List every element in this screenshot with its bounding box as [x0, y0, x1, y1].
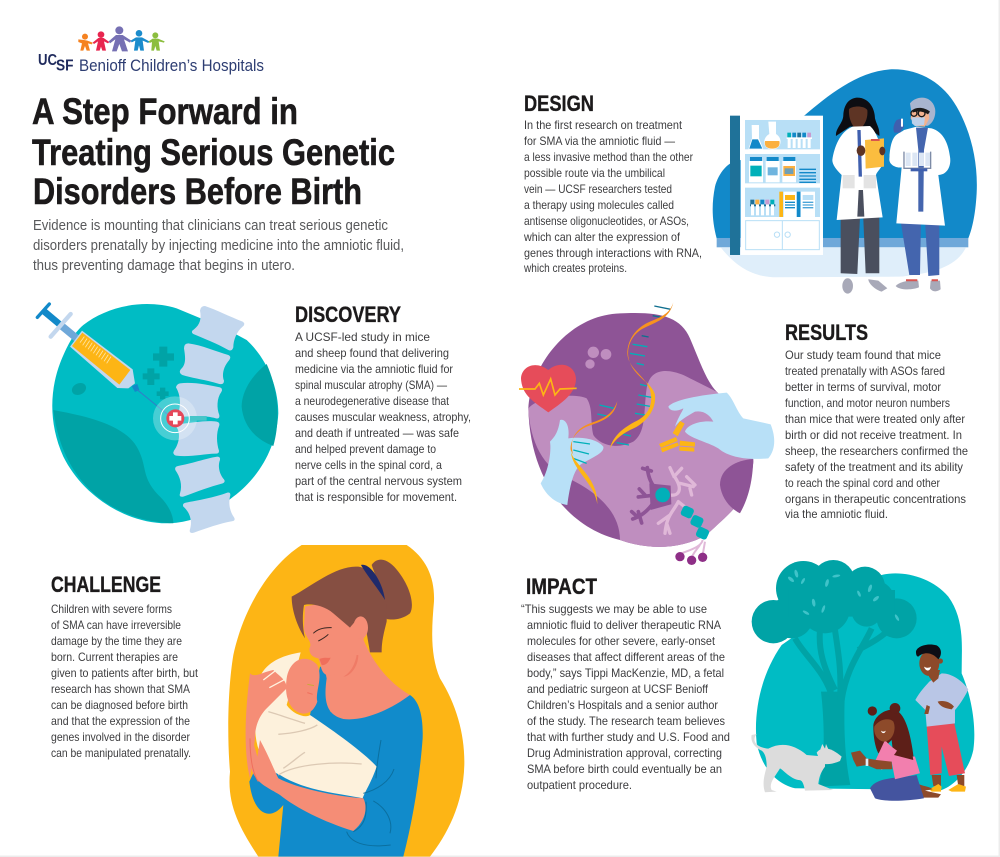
lab shelf	[730, 116, 823, 255]
panel: challenge text	[51, 572, 199, 760]
icon: paper-chain children	[78, 26, 165, 51]
heading: design: DESIGN	[524, 91, 594, 116]
tree	[752, 560, 917, 787]
illustration: lab researchers	[713, 69, 977, 294]
body: results: sheep, the researchers confirmed the	[785, 445, 968, 458]
title: A Step Forward in	[32, 90, 298, 132]
illustration: syringe and spine	[37, 304, 278, 533]
body: impact: body,” says Tippi MacKenzie, MD, a fetal	[527, 667, 724, 680]
body: discovery: and death if untreated — was safe	[295, 427, 459, 440]
mother's face	[304, 604, 367, 675]
body: discovery: medicine via the amniotic fluid for	[295, 363, 453, 376]
mother's hair bun	[372, 560, 412, 619]
DNA strands	[571, 302, 673, 504]
title: Disorders Before Birth	[33, 170, 362, 212]
logo wordmark Benioff: Benioff Children’s Hospitals	[79, 57, 264, 75]
body: impact: diseases that affect different areas of the	[527, 651, 725, 664]
body: impact	[521, 603, 730, 792]
yellow blob	[228, 545, 464, 857]
heart icon	[519, 365, 577, 412]
body: impact: “This suggests we may be able to use	[521, 603, 707, 616]
teal blob	[756, 573, 974, 790]
intro text	[33, 218, 404, 274]
logo wordmark UCSF: SF	[56, 58, 74, 74]
body: results: better in terms of survival, motor	[785, 381, 941, 394]
body: impact: of the study. The research team believes	[527, 715, 725, 728]
illustration: DNA, heart, hands and neuron	[519, 302, 774, 565]
hand: right	[668, 393, 774, 459]
medical pluses	[143, 347, 174, 399]
logo wordmark UCSF	[38, 52, 74, 74]
tree leaves	[787, 569, 900, 622]
mother's skin: neck and chest	[323, 635, 410, 719]
heading: challenge: CHALLENGE	[51, 572, 161, 597]
body: impact: Drug Administration approval, correcting	[527, 747, 722, 760]
purple blob	[528, 313, 753, 547]
body: challenge	[51, 603, 199, 760]
body: challenge: born. Current therapies are	[51, 651, 178, 664]
body: challenge: damage by the time they are	[51, 635, 182, 648]
title	[32, 90, 395, 212]
heading: results: RESULTS	[785, 320, 868, 345]
body: design: vein — UCSF researchers tested	[524, 183, 672, 196]
body: challenge: can be diagnosed before birth	[51, 699, 188, 712]
title: Treating Serious Genetic	[32, 131, 395, 173]
body: discovery: part of the central nervous system	[295, 475, 462, 488]
body: discovery: that is responsible for movement.	[295, 491, 457, 504]
body: results: Our study team found that mice	[785, 349, 941, 362]
body: discovery	[295, 331, 471, 504]
body: discovery: A UCSF-led study in mice	[295, 331, 430, 344]
body: design: a less invasive method than the other	[524, 151, 693, 164]
syringe	[37, 304, 168, 415]
body: challenge: Children with severe forms	[51, 603, 172, 616]
panel: discovery text	[295, 302, 471, 504]
body: design: which can alter the expression of	[523, 231, 681, 244]
body: discovery: spinal muscular atrophy (SMA) —	[295, 379, 447, 392]
intro text: Evidence is mounting that clinicians can treat serious genetic	[33, 218, 388, 234]
logo wordmark UCSF: UC	[38, 52, 57, 69]
spine vertebrae	[173, 306, 244, 533]
body: discovery: and helped prevent damage to	[295, 443, 436, 456]
body: impact: Children’s Hospitals and a senior author	[527, 699, 718, 712]
body: results: via the amniotic fluid.	[785, 508, 888, 521]
body: impact: molecules for other severe, early-onset	[527, 635, 716, 648]
body: results: safety of the treatment and its ability	[785, 461, 963, 474]
baby blanket	[255, 652, 377, 798]
panel: design text	[523, 91, 702, 275]
illustration: mother and baby	[228, 545, 464, 857]
body: impact: and pediatric surgeon at UCSF Benioff	[527, 683, 709, 696]
body: challenge: of SMA can have irreversible	[51, 619, 181, 632]
body: discovery: and sheep found that delivering	[295, 347, 449, 360]
man researcher	[889, 98, 950, 291]
body: challenge: can be manipulated prenatally.	[51, 747, 191, 760]
body: challenge: research has shown that SMA	[51, 683, 190, 696]
body: design	[523, 119, 702, 275]
mother's hair	[292, 567, 387, 652]
hand: left	[541, 420, 603, 505]
body: impact: SMA before birth could eventually be an	[527, 763, 722, 776]
heading: impact: IMPACT	[526, 574, 597, 599]
neuron	[632, 468, 710, 565]
body: design: genes through interactions with RNA,	[524, 247, 702, 260]
illustration: children, dog and tree	[751, 560, 974, 801]
boy	[915, 644, 968, 792]
body: discovery: a neurodegenerative disease that	[295, 395, 450, 408]
body: design: possible route via the umbilical	[524, 167, 665, 180]
body: results: to reach the spinal cord and other	[785, 477, 940, 490]
body: design: In the first research on treatment	[524, 119, 683, 132]
teal blob	[52, 304, 278, 523]
body: challenge: given to patients after birth, but	[51, 667, 199, 680]
body: impact: amniotic fluid to deliver therapeutic RNA	[527, 619, 721, 632]
body: results: birth or did not receive treatment. In	[785, 429, 962, 442]
mother's hands and arm	[246, 670, 366, 831]
body: design: a therapy using molecules called	[524, 199, 674, 212]
body: challenge: genes involved in the disorder	[51, 731, 190, 744]
body: results: organs in therapeutic concentrations	[785, 493, 966, 506]
injection target	[153, 396, 207, 440]
body: challenge: and that the expression of the	[51, 715, 190, 728]
body: impact: outpatient procedure.	[527, 779, 632, 792]
body: impact: that with further study and U.S. Food and	[527, 731, 730, 744]
panel: impact text	[521, 574, 730, 792]
body: results: treated prenatally with ASOs fared	[785, 365, 945, 378]
baby face	[286, 659, 320, 714]
body: discovery: nerve cells in the spinal cord, a	[295, 459, 442, 472]
body: design: which creates proteins.	[523, 262, 627, 275]
body: results: than mice that were treated only after	[785, 413, 965, 426]
body: design: antisense oligonucleotides, or ASOs,	[524, 215, 689, 228]
mother's top	[249, 667, 423, 857]
body: results: function, and motor neuron numbers	[785, 397, 950, 410]
body: design: for SMA via the amniotic fluid —	[524, 135, 675, 148]
woman researcher	[832, 98, 887, 294]
dog	[751, 734, 842, 792]
body: results	[785, 349, 968, 521]
antisense molecules	[659, 421, 695, 452]
panel: results text	[785, 320, 968, 521]
body: discovery: causes muscular weakness, atrophy,	[295, 411, 471, 424]
heading: discovery: DISCOVERY	[295, 302, 401, 327]
intro text: disorders prenatally by injecting medicine into the amniotic fluid,	[33, 238, 404, 254]
girl	[851, 703, 941, 801]
logo: UCSF Benioff Children's Hospitals	[38, 26, 264, 75]
intro text: thus preventing damage that begins in utero.	[33, 258, 295, 274]
background blob	[713, 69, 977, 238]
